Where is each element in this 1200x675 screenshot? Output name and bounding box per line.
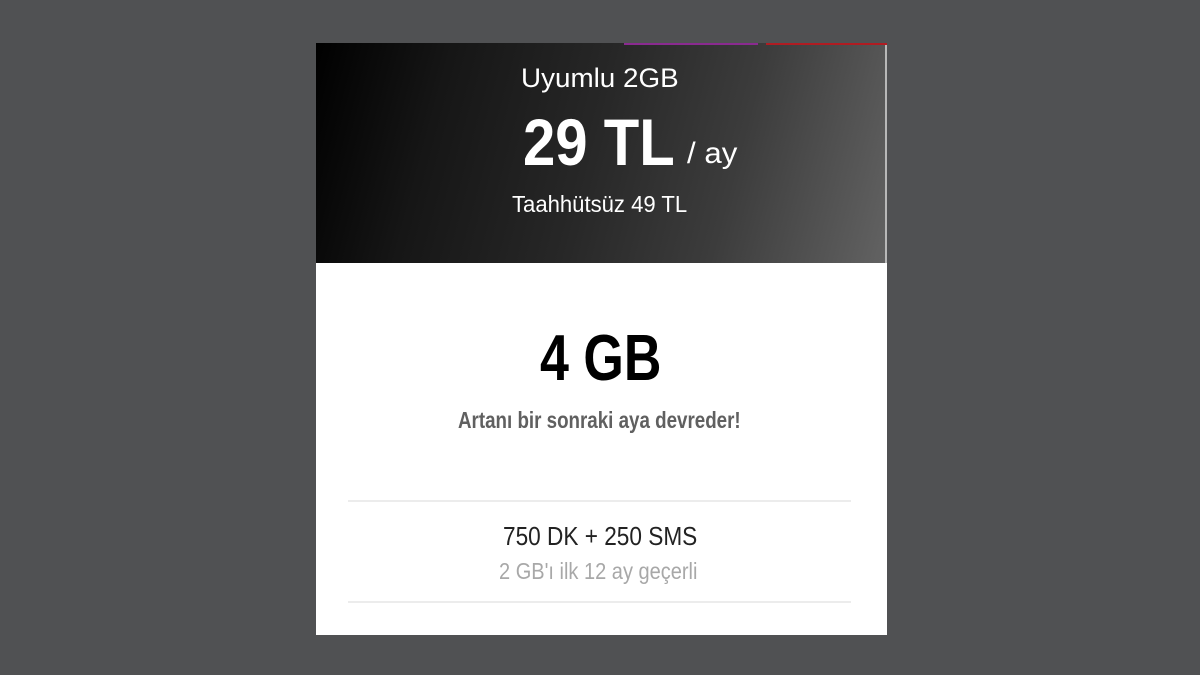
accent line: purple [624,43,758,45]
price period: / ay [687,137,737,170]
accent line: red [766,43,887,45]
panel: price header [316,43,887,263]
divider: top [348,500,851,502]
validity note: 2 GB'ı ilk 12 ay geçerli [499,558,697,584]
price: 29 TL [523,105,675,179]
rollover note: Artanı bir sonraki aya devreder! [458,407,741,433]
plan name: Uyumlu 2GB [521,63,679,93]
minutes and SMS: 750 DK + 250 SMS [503,521,697,551]
no-commitment price: Taahhütsüz 49 TL [512,191,687,217]
plan card [316,43,887,635]
divider: bottom [348,601,851,603]
data allowance: 4 GB [540,321,661,394]
